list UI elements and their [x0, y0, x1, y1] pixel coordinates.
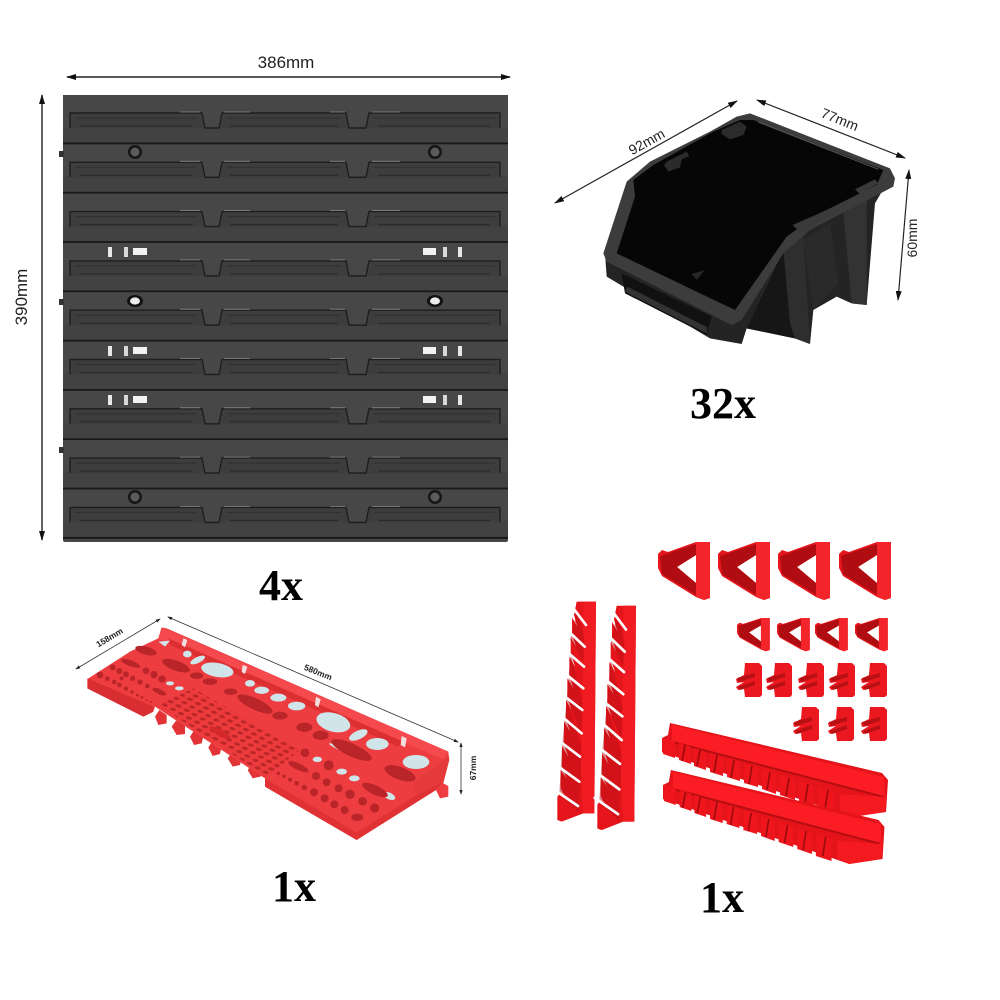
label: 67mm: 67mm — [468, 755, 478, 780]
blind slots and holes — [97, 644, 418, 821]
arrow: 60mm dimension — [898, 170, 909, 300]
large triangle holders — [658, 542, 891, 600]
tool shelf body — [87, 627, 449, 840]
small clips — [736, 663, 887, 741]
arrow: 158mm dimension — [76, 619, 160, 669]
label: 1x shelf: 1x — [272, 862, 316, 911]
label: 386mm: 386mm — [258, 53, 314, 72]
label: 77mm: 77mm — [819, 105, 861, 134]
arrow: 67mm dimension — [460, 743, 462, 794]
arrow: 580mm dimension — [168, 617, 458, 742]
label: 32x: 32x — [690, 379, 756, 428]
label: 1x accessories: 1x — [700, 873, 744, 922]
arrow: width dimension — [67, 76, 510, 78]
wrench racks — [555, 602, 636, 830]
center pegboard holes — [158, 688, 300, 777]
small triangle holders — [737, 618, 888, 651]
label: 4x: 4x — [259, 561, 303, 610]
panel: red tool shelf — [87, 627, 449, 840]
arrow: 92mm dimension — [555, 101, 737, 203]
arrow: height dimension — [41, 95, 43, 540]
long rails — [662, 723, 888, 864]
panel: wall board 386x390mm — [59, 95, 508, 542]
panel: red accessories set — [555, 542, 891, 864]
label: 60mm: 60mm — [904, 219, 920, 257]
icon: screws and pegs — [59, 145, 443, 504]
icon: white clip slots — [108, 247, 462, 405]
label: 390mm: 390mm — [12, 269, 31, 325]
label: 92mm: 92mm — [626, 125, 667, 158]
arrow: 77mm dimension — [757, 100, 905, 158]
label: 580mm: 580mm — [303, 662, 334, 683]
back row through-holes — [158, 641, 429, 802]
panel: black storage bin — [603, 113, 895, 344]
label: 158mm: 158mm — [94, 625, 125, 649]
